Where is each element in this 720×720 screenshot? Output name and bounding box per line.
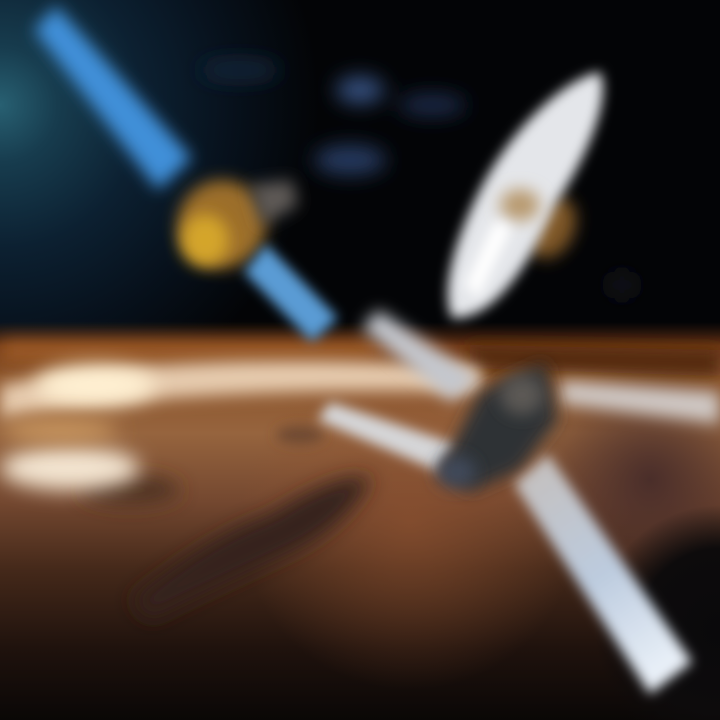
station body — [440, 362, 558, 492]
upper arm — [362, 310, 480, 402]
long white solar panel — [514, 454, 692, 694]
satellite: white dish — [448, 72, 603, 318]
satellite: lower white station — [318, 310, 692, 694]
left arm — [318, 402, 458, 472]
warm central land — [240, 350, 580, 690]
right side ocean — [530, 360, 720, 600]
distant nebula clouds — [200, 60, 636, 299]
dark right edge — [595, 505, 720, 720]
satellite: blue solar arrays — [34, 6, 338, 342]
Earth surface — [0, 322, 720, 720]
lower blue solar panel — [244, 244, 338, 342]
upper blue solar panel — [34, 6, 192, 190]
dark cloud streak — [130, 477, 372, 620]
horizon glow — [0, 342, 720, 490]
dish rim shadow — [519, 190, 585, 266]
satellite body — [178, 180, 266, 268]
